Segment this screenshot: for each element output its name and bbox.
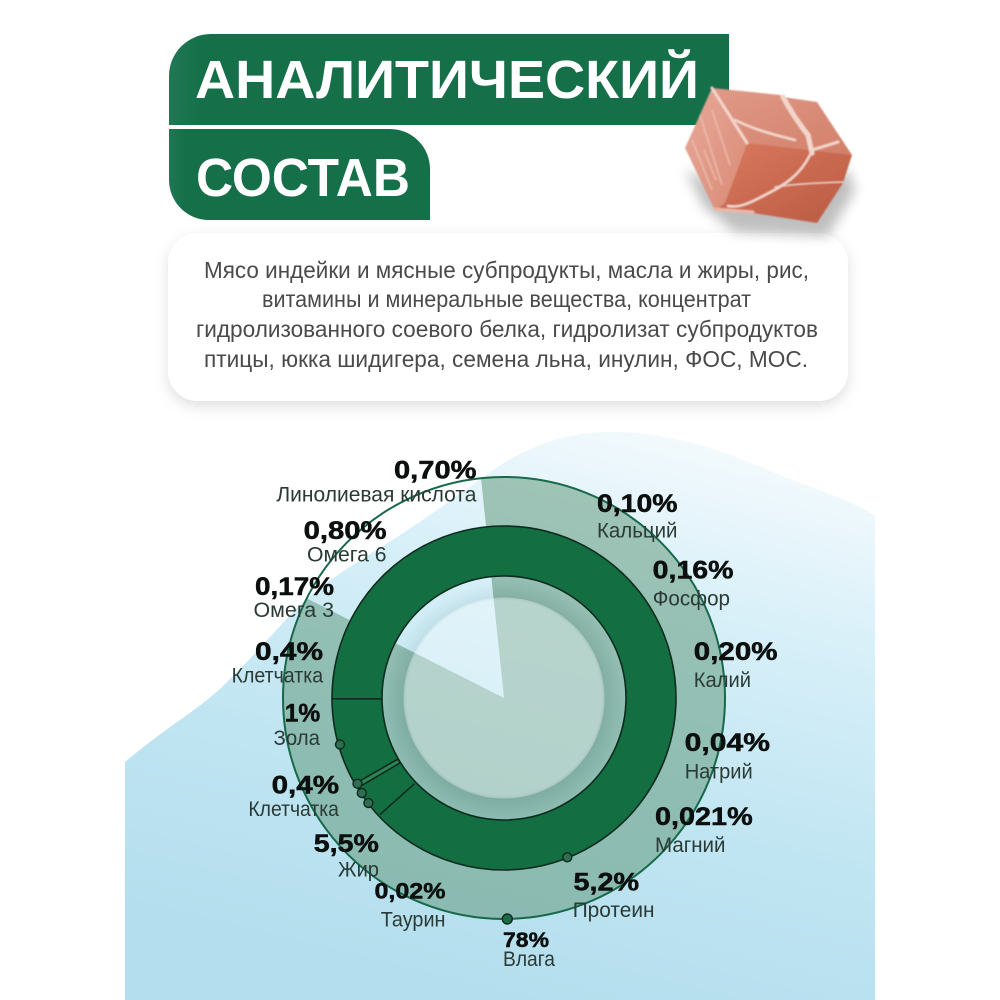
label: fiber lower: [248, 772, 339, 821]
ring segment dividers: [332, 699, 414, 814]
label: protein: [573, 869, 654, 922]
label: phosphorus: 0,16%: [653, 556, 734, 584]
label: omega 6: 0,80%: [304, 517, 387, 545]
label: taurine: 0,02%: [374, 879, 446, 904]
outer ring outline: [283, 477, 725, 919]
label: potassium: 0,20%: [694, 638, 778, 666]
label: magnesium: Магний: [655, 834, 726, 857]
label: sodium: Натрий: [685, 760, 753, 783]
label: fiber upper: 0,4%: [255, 638, 323, 666]
background wave: [125, 432, 875, 1000]
label: protein: 5,2%: [574, 869, 639, 897]
label: phosphorus: Фосфор: [653, 588, 730, 610]
label: magnesium: 0,021%: [655, 803, 753, 831]
label: magnesium: [655, 803, 753, 857]
ingredients text: Мясо индейки и мясные субпродукты, масла и жиры, рис,: [204, 257, 809, 283]
label: fat: Жир: [338, 859, 379, 882]
label: moisture: 78%: [503, 929, 549, 952]
label: calcium: Кальций: [597, 520, 678, 542]
label: linoleic acid: 0,70%: [394, 457, 476, 485]
label: moisture: [503, 929, 555, 971]
label: linoleic acid: [276, 457, 477, 506]
segment marker dots: [336, 740, 572, 924]
ingredients card: [168, 233, 848, 401]
label: omega 3: 0,17%: [255, 573, 334, 601]
label: phosphorus: [653, 556, 734, 610]
label: omega 6: [304, 517, 387, 567]
label: ash: 1%: [285, 700, 320, 728]
label: fat: 5,5%: [314, 830, 379, 858]
inner shading: [393, 586, 616, 809]
green ring: [332, 526, 676, 870]
label: sodium: 0,04%: [685, 729, 770, 757]
label: potassium: Калий: [694, 669, 751, 692]
label: fiber lower: 0,4%: [272, 772, 339, 800]
title: first line: [169, 34, 729, 125]
label: ash: [274, 700, 320, 750]
label: ash: Зола: [274, 727, 320, 750]
label: moisture: Влага: [503, 948, 555, 971]
label: sodium: [685, 729, 770, 783]
label: omega 3: Омега 3: [254, 599, 334, 622]
label: omega 3: [254, 573, 334, 622]
label: linoleic acid: Линолиевая кислота: [276, 483, 477, 506]
label: omega 6: Омега 6: [307, 544, 386, 567]
label: fat: [314, 830, 379, 882]
label: potassium: [694, 638, 778, 692]
outer translucent ring with cut-out wedge: [283, 477, 725, 919]
label: taurine: Таурин: [381, 908, 446, 931]
label: calcium: [597, 490, 678, 542]
label: calcium: 0,10%: [597, 490, 678, 518]
label: taurine: [374, 879, 446, 931]
title: first line: АНАЛИТИЧЕСКИЙ: [195, 49, 699, 110]
label: protein: Протеин: [573, 899, 654, 922]
ingredients text: [196, 257, 818, 372]
ingredients text: птицы, юкка шидигера, семена льна, инулин, ФОС, МОС.: [204, 346, 808, 372]
donut chart: [283, 477, 725, 924]
icon: meat cube: [685, 88, 855, 236]
title: second line: СОСТАВ: [196, 148, 410, 208]
ingredients text: гидролизованного соевого белка, гидролизат субпродуктов: [196, 316, 818, 342]
ingredients text: витамины и минеральные вещества, концентрат: [262, 286, 751, 312]
label: fiber upper: Клетчатка: [232, 665, 323, 688]
label: fiber lower: Клетчатка: [248, 798, 339, 821]
inner pale disc: [404, 598, 604, 798]
label: fiber upper: [232, 638, 323, 688]
title: second line: [169, 129, 430, 220]
